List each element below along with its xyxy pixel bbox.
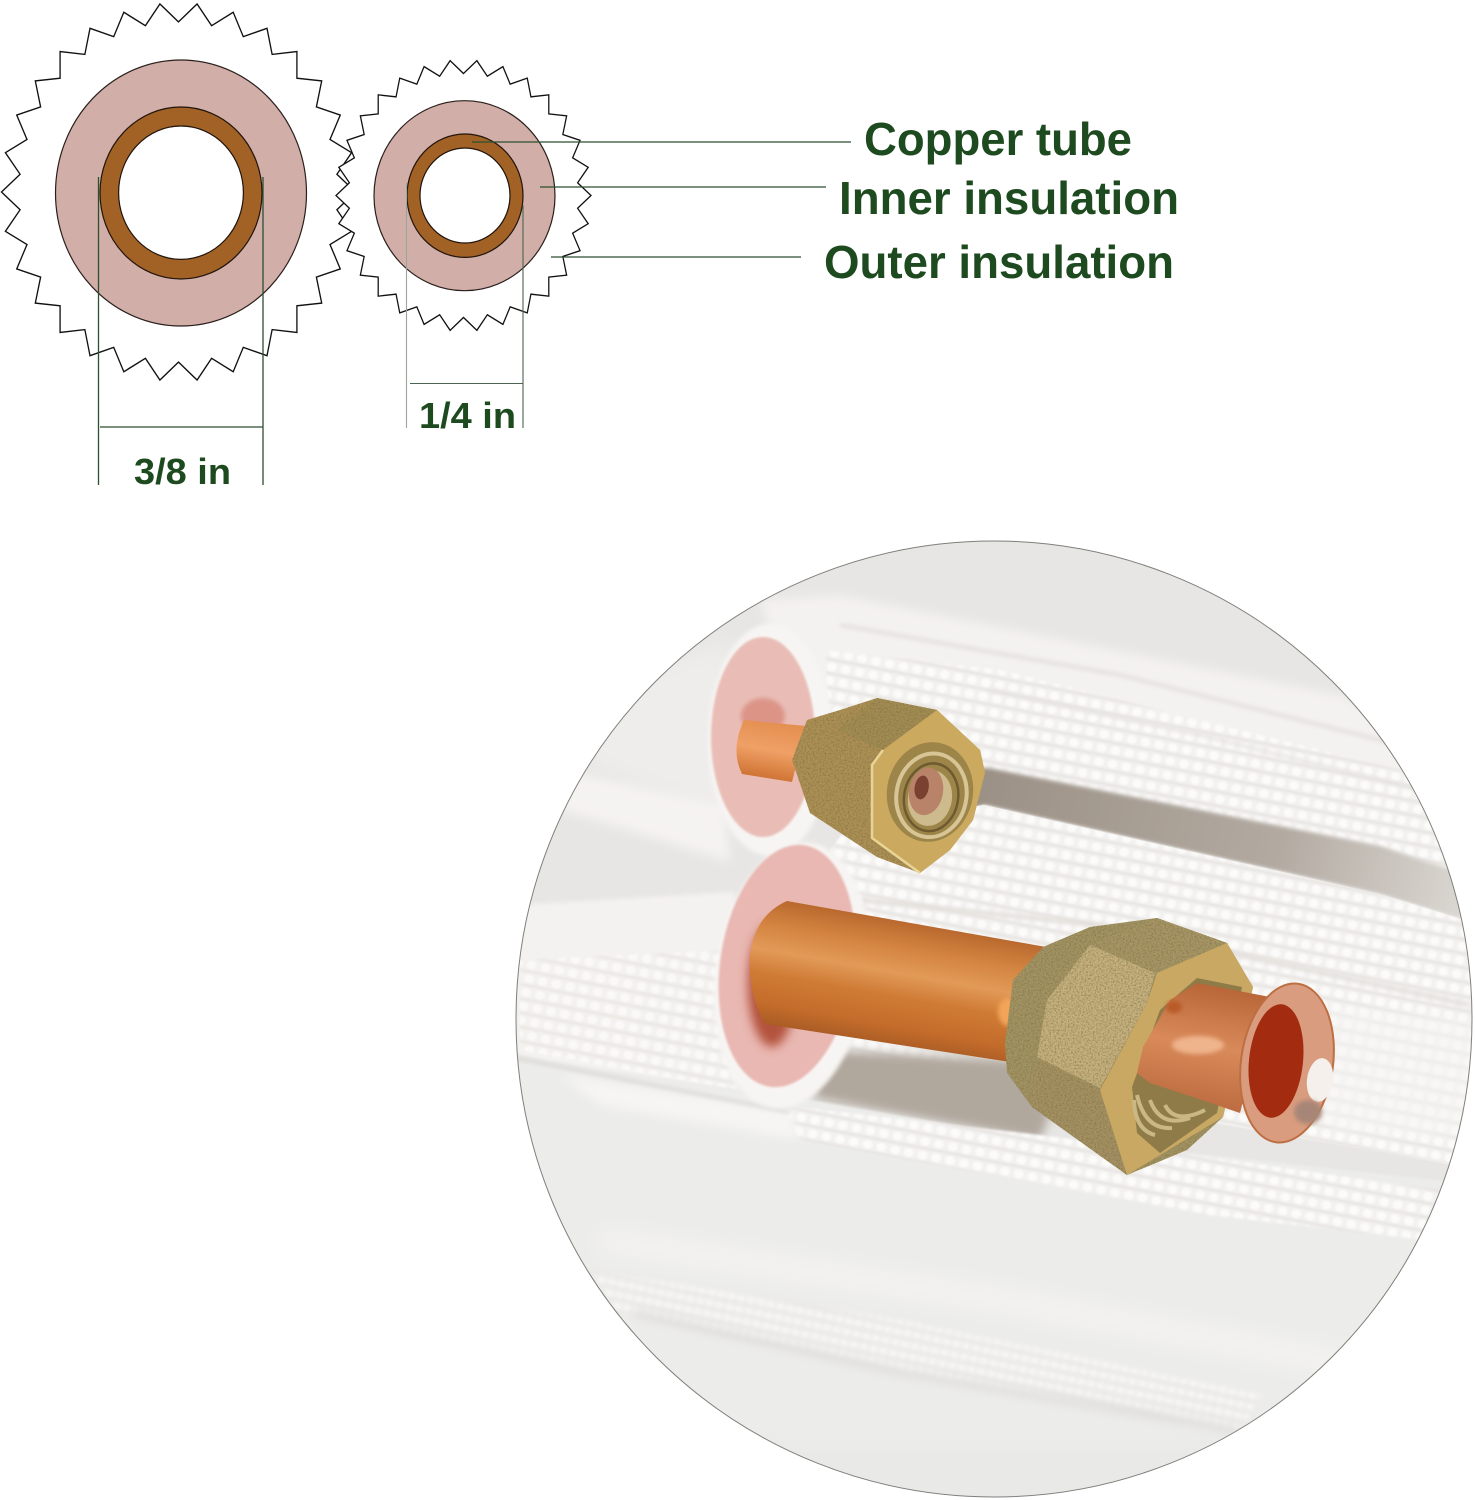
copper tube ring xyxy=(100,107,262,279)
leader line: inner insulation xyxy=(540,186,826,188)
leader line: outer insulation xyxy=(551,256,801,258)
lower insulated tube xyxy=(520,1057,1438,1420)
inner insulation ring xyxy=(56,60,306,326)
diagram: pipe cross-sections xyxy=(1,4,591,380)
shadow gap between tubes xyxy=(960,768,1475,925)
nut bore and threads xyxy=(886,742,974,842)
left tube bodies xyxy=(517,776,738,1089)
nut bore and threads xyxy=(1132,978,1242,1153)
dimension lines: 1/4 in xyxy=(406,183,523,428)
tube bore xyxy=(420,148,510,243)
shadow under large copper tube xyxy=(812,1050,1050,1140)
dimension lines: 3/8 in xyxy=(98,177,263,485)
foam end: small tube xyxy=(710,625,816,856)
flare rim xyxy=(1239,982,1335,1144)
outer insulation gear outline xyxy=(1,4,356,380)
copper tube ring xyxy=(407,134,523,257)
copper stub: small tube xyxy=(736,720,806,782)
upper insulated tube xyxy=(765,597,1445,862)
foam end: large tube xyxy=(715,842,864,1108)
outer insulation gear outline xyxy=(336,61,591,330)
3/8 in pipe cross-section xyxy=(1,4,356,380)
photo background xyxy=(516,542,1448,1182)
dimension label: 1/4 in: 1/4 in xyxy=(419,395,516,436)
label: inner insulation: Inner insulation xyxy=(839,172,1179,224)
dimension label: 3/8 in: 3/8 in xyxy=(134,451,231,492)
middle insulated tube xyxy=(810,805,1475,1170)
large copper tube xyxy=(750,901,1046,1062)
brass flare nut: large xyxy=(1005,918,1253,1175)
tube bore xyxy=(119,126,243,259)
inner insulation ring xyxy=(374,101,555,291)
photo circle border xyxy=(516,541,1472,1497)
flare interior xyxy=(1248,1004,1304,1118)
brass flare nut: small xyxy=(792,698,985,873)
label: outer insulation: Outer insulation xyxy=(824,236,1174,288)
flared copper tube end xyxy=(1137,977,1344,1149)
leader line: copper tube xyxy=(472,141,851,143)
label: copper tube: Copper tube xyxy=(864,113,1132,165)
1/4 in pipe cross-section xyxy=(336,61,591,330)
nut rim xyxy=(1100,943,1253,1175)
photo: insulated copper pipes with brass nuts xyxy=(510,535,1475,1500)
